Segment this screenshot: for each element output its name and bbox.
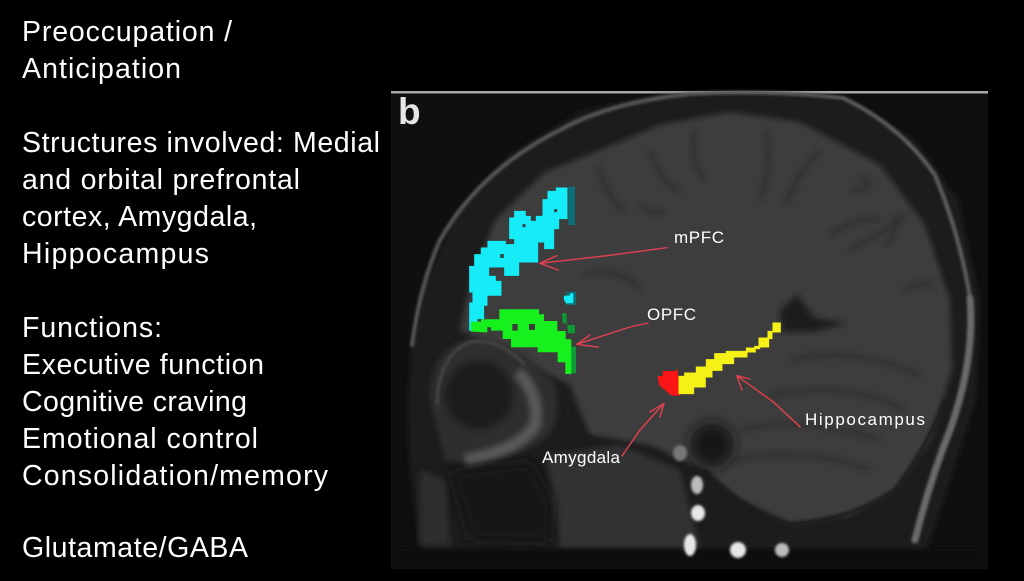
text block: functions: Emotional control [22,423,258,455]
Hippocampus overlay (yellow) [679,323,780,393]
Amygdala overlay (red) [658,369,679,395]
arrow: Hippocampus [737,376,800,427]
text block: structures involved: Hippocampus [22,238,209,270]
text block: functions: Functions: [22,312,162,344]
heading: Preoccupation / Anticipation [22,16,232,85]
letter b: b [398,91,421,132]
label: Amygdala: Amygdala [542,448,621,467]
heading: Preoccupation / Anticipation: Preoccupation / [22,16,232,48]
arrow: OPFC [577,323,648,347]
left text panel [22,16,380,564]
text block: neurotransmitters: Glutamate/GABA [22,532,248,564]
text block: functions: Consolidation/memory [22,460,329,492]
OPFC overlay (green) [472,310,576,373]
text block: functions: Executive function [22,349,264,381]
text block: structures involved: and orbital prefrontal [22,164,300,196]
heading: Preoccupation / Anticipation: Anticipation [22,53,181,85]
scalp and skull bands [412,93,971,540]
arrow: Amygdala [622,403,664,456]
MRI background [391,91,988,569]
label: Hippocampus: Hippocampus [805,410,925,429]
label: OPFC: OPFC [647,305,696,324]
cerebellum border [705,400,945,524]
lower face and sinus [395,423,980,569]
text block: structures involved: Structures involved: Medial [22,127,380,159]
brain-skull base gap [560,385,660,455]
panel: sagittal brain MRI [391,91,988,569]
bright spine spots [673,445,789,558]
arrow: mPFC [540,248,667,270]
region overlays [470,187,576,373]
text block: functions: Cognitive craving [22,386,247,418]
ventricle [780,295,847,332]
text block: structures involved [22,127,380,270]
head tissue [408,94,980,555]
cortical folds [585,130,935,470]
mPFC overlay (cyan) [470,187,576,330]
label: mPFC: mPFC [674,228,724,247]
text block: structures involved: cortex, Amygdala, [22,201,257,233]
text block: functions [22,312,329,492]
brain tissue [460,112,952,524]
orbit and eye [430,338,558,463]
